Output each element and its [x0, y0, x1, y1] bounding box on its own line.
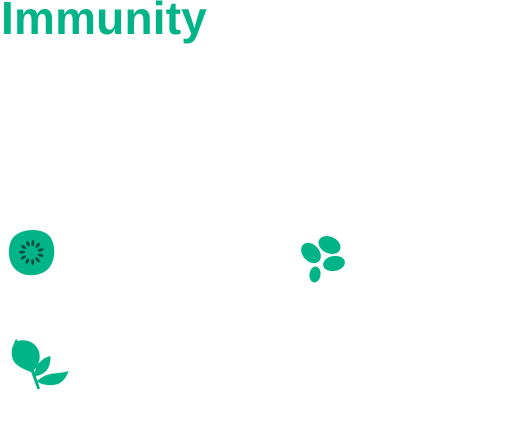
icon: seeds: [297, 233, 346, 283]
icon: leaf sprig: [12, 339, 69, 390]
icon: kiwi slice: [9, 230, 54, 275]
